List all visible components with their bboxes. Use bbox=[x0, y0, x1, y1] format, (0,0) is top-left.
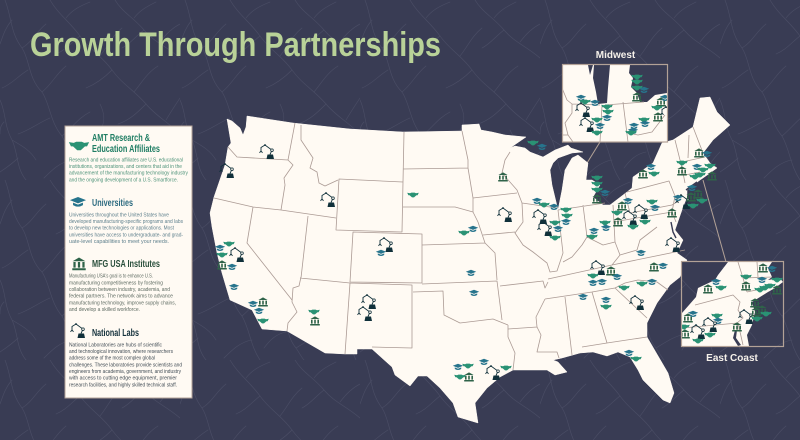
body text: National Labs: address some of the most complex global bbox=[69, 356, 155, 362]
icon: graduation cap bbox=[70, 197, 86, 207]
heading: AMT: Education Affiliates bbox=[92, 144, 160, 155]
inset: East Coast bbox=[678, 262, 784, 364]
icon: handshake bbox=[69, 142, 89, 150]
legend: AMT Research & Education Affiliates bbox=[69, 133, 188, 183]
body text: Universities: universities have access to undergraduate- and grad- bbox=[69, 232, 183, 238]
panel: legend bbox=[65, 126, 192, 398]
state borders bbox=[214, 123, 705, 370]
heading: MFG USA: MFG USA Institutes bbox=[92, 259, 160, 270]
inset heading: Midwest bbox=[596, 50, 636, 61]
body text: National Labs: research facilities, and highly skilled technical staff. bbox=[69, 382, 177, 388]
body text: AMT: advancement of the manufacturing technology industry bbox=[69, 171, 188, 177]
body text: Universities: uate-level capabilities to meet your needs. bbox=[69, 239, 169, 245]
body text: MFG USA: manufacturing competitiveness by fostering bbox=[69, 280, 163, 286]
body text: MFG USA: Manufacturing USA's goal is to enhance U.S. bbox=[69, 274, 153, 280]
body text: Universities bbox=[69, 212, 183, 245]
legend: MFG USA Institutes bbox=[69, 258, 176, 313]
legend: Universities bbox=[69, 197, 183, 245]
body text: Universities: developed manufacturing-specific programs and labs bbox=[69, 219, 183, 225]
legend: National Labs bbox=[68, 323, 182, 388]
map: United States bbox=[210, 97, 730, 423]
body text: National Labs: and technological innovation, where researchers bbox=[69, 349, 173, 355]
body text: AMT: Research and education affiliates are U.S. educational bbox=[69, 157, 183, 163]
inset heading: East Coast bbox=[706, 353, 759, 364]
body text: AMT: and the ongoing development of a U.S. Smartforce. bbox=[69, 177, 178, 183]
body text: MFG USA: federal partners. The network aims to advance bbox=[69, 294, 173, 300]
body text: National Labs: engineers from academia, government, and industry bbox=[69, 369, 181, 375]
body text: Universities: Universities throughout the United States have bbox=[69, 212, 169, 218]
body text: AMT: institutions, organizations, and centers that aid in the bbox=[69, 164, 182, 170]
body text: Universities: to develop new technologies or applications. Most bbox=[69, 226, 174, 232]
icon: institute building bbox=[72, 258, 86, 270]
Chesapeake and Long Island Sound bbox=[671, 182, 697, 238]
body text: AMT bbox=[69, 157, 188, 183]
title: Growth Through Partnerships bbox=[30, 26, 441, 64]
body text: MFG USA: collaboration between industry, academia, and bbox=[69, 287, 170, 293]
body text: MFG USA: and develop a skilled workforce. bbox=[69, 307, 140, 313]
heading: Universities: Universities bbox=[92, 198, 133, 209]
body text: MFG USA bbox=[69, 274, 176, 313]
body text: National Labs bbox=[68, 342, 182, 388]
icon: robotic arm bbox=[70, 323, 85, 338]
connector lines to insets bbox=[558, 142, 726, 262]
inset: Midwest bbox=[562, 50, 675, 142]
body text: National Labs: challenges. These laboratories provide scientists and bbox=[69, 362, 182, 368]
heading: AMT: AMT Research & bbox=[92, 133, 150, 144]
body text: National Labs: with access to cutting edge equipment, premier bbox=[68, 376, 177, 382]
body text: MFG USA: manufacturing technology, improve supply chains, bbox=[69, 300, 176, 306]
body text: National Labs: National Laboratories are hubs of scientific bbox=[69, 342, 162, 348]
map icons: East bbox=[527, 141, 717, 361]
heading: National Labs: National Labs bbox=[92, 328, 139, 339]
map icons: West bbox=[215, 144, 512, 382]
land outline bbox=[210, 97, 730, 423]
